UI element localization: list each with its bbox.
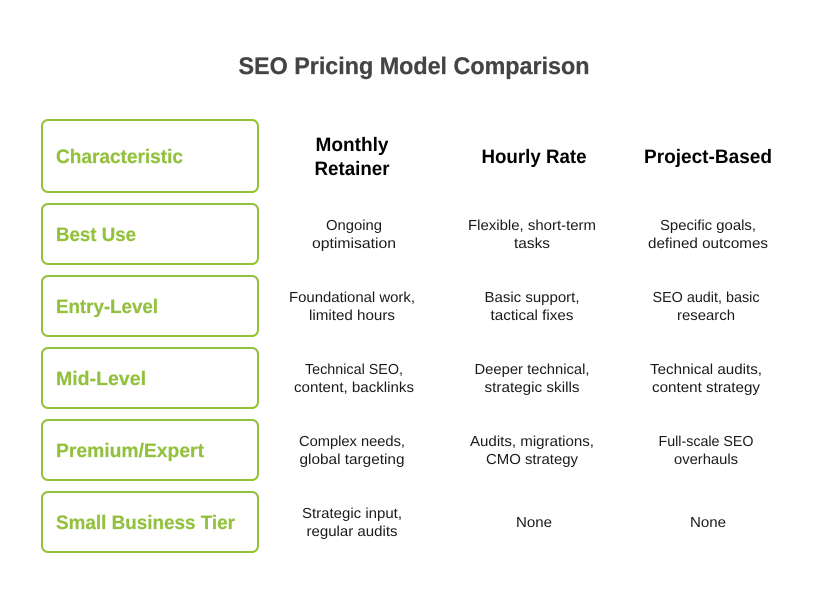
cell: Project-Based mid-level: content strategy [652,380,761,396]
cell: Monthly Retainer small business: regular audits [306,524,398,540]
cell: Monthly Retainer best use: Ongoing [326,218,382,234]
column heading: Monthly Retainer: Monthly [316,134,389,156]
row: Entry-Level [42,276,760,336]
cell: Monthly Retainer mid-level: content, backlinks [294,380,414,396]
cell: Monthly Retainer best use [312,218,396,252]
row: Small Business Tier [42,492,726,552]
cell: Monthly Retainer small business [302,506,402,540]
cell: Hourly Rate best use: Flexible, short-term [468,218,596,234]
column heading: Monthly Retainer [314,134,390,180]
label box: Best Use [42,204,258,264]
cell: Project-Based best use: Specific goals, [660,218,756,234]
cell: Hourly Rate best use: tasks [514,236,550,252]
cell: Monthly Retainer mid-level [294,362,414,396]
row: Characteristic header [42,120,772,192]
cell: Hourly Rate entry-level: Basic support, [484,290,580,306]
cell: Project-Based entry-level: research [677,308,735,324]
row: Best Use [42,204,768,264]
cell: Hourly Rate premium [470,434,594,468]
cell: Hourly Rate entry-level [484,290,580,324]
cell: Project-Based mid-level [650,362,762,396]
cell: Monthly Retainer premium [299,434,405,468]
cell: Monthly Retainer entry-level: Foundational work, [289,290,415,306]
cell: Project-Based entry-level [652,290,760,324]
cell: Project-Based entry-level: SEO audit, basic [652,290,760,306]
cell: Monthly Retainer entry-level [289,290,415,324]
cell: Hourly Rate mid-level [474,362,590,396]
cell: Monthly Retainer entry-level: limited hours [309,308,395,324]
cell: Hourly Rate mid-level: strategic skills [484,380,580,396]
label box: Mid-Level: Mid-Level [56,368,146,390]
row: Mid-Level [42,348,762,408]
cell: Project-Based premium [658,434,754,468]
cell: Monthly Retainer mid-level: Technical SEO, [305,362,403,378]
cell: Hourly Rate premium: Audits, migrations, [470,434,594,450]
cell: Project-Based best use: defined outcomes [648,236,768,252]
cell: Monthly Retainer premium: Complex needs, [299,434,405,450]
cell: Monthly Retainer premium: global targeting [300,452,404,468]
cell: Hourly Rate best use [468,218,596,252]
cell: Hourly Rate mid-level: Deeper technical, [474,362,590,378]
label box: Characteristic: Characteristic [56,146,183,168]
column heading: Project-Based: Project-Based [644,146,772,168]
label box: Small Business Tier [42,492,258,552]
title: SEO Pricing Model Comparison [238,53,590,80]
cell: Monthly Retainer best use: optimisation [312,236,396,252]
label box: Entry-Level [42,276,258,336]
label box: Entry-Level: Entry-Level [56,296,158,318]
row: Premium/Expert [42,420,754,480]
cell: Hourly Rate small business: None [516,515,552,531]
cell: Project-Based premium: overhauls [674,452,738,468]
label box: Premium/Expert [42,420,258,480]
label box: Premium/Expert: Premium/Expert [56,440,204,462]
cell: Project-Based premium: Full-scale SEO [658,434,754,450]
cell: Hourly Rate premium: CMO strategy [486,452,579,468]
column heading: Monthly Retainer: Retainer [314,158,390,180]
label box: Small Business Tier: Small Business Tier [56,512,235,534]
cell: Monthly Retainer small business: Strategic input, [302,506,402,522]
label box: Characteristic [42,120,258,192]
cell: Project-Based small business: None [690,515,726,531]
label box: Mid-Level [42,348,258,408]
cell: Hourly Rate entry-level: tactical fixes [490,308,574,324]
cell: Project-Based best use [648,218,768,252]
cell: Project-Based mid-level: Technical audits, [650,362,762,378]
label box: Best Use: Best Use [56,224,136,246]
column heading: Hourly Rate: Hourly Rate [482,146,587,168]
